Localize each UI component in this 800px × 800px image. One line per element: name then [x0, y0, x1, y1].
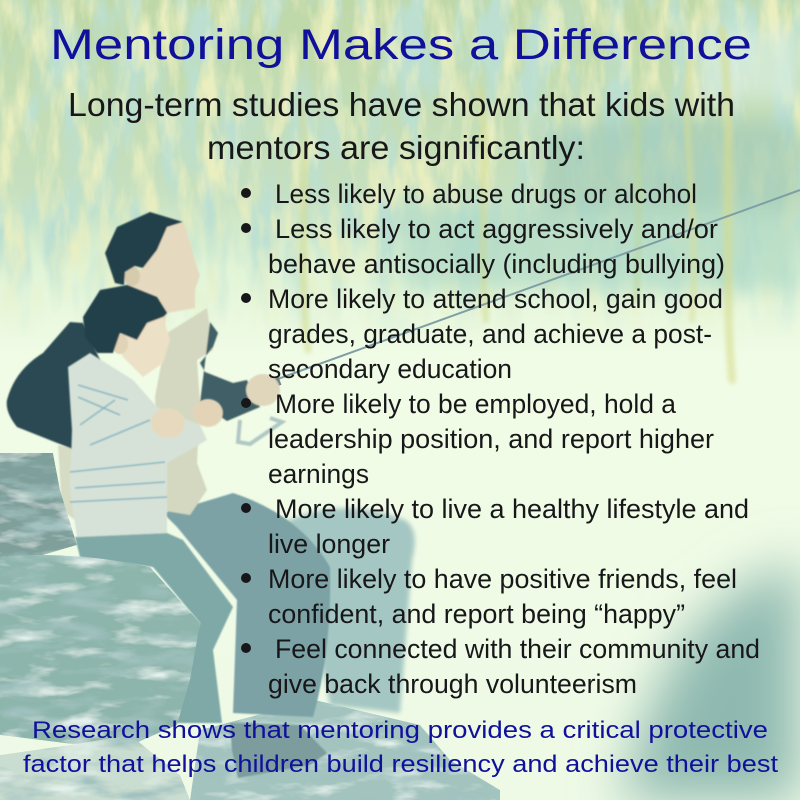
father legs [163, 493, 330, 717]
boy arm and hand [193, 399, 223, 427]
boy ear [112, 334, 128, 354]
large rock [0, 555, 200, 750]
bullet 4 [241, 389, 714, 489]
father jacket [7, 322, 100, 452]
distant pavilion and water [400, 30, 800, 290]
bullet 2: behave antisocially (including bullying) [268, 249, 725, 279]
father lower vest [58, 445, 80, 520]
bullet 4: earnings [268, 459, 369, 489]
father hair [105, 212, 183, 285]
lower right misty rock [620, 560, 800, 800]
bullet 3: More likely to attend school, gain good [268, 284, 723, 314]
photo: boy [68, 285, 233, 723]
rock behind boy [0, 453, 77, 557]
boy hair [83, 285, 167, 353]
pale rock bottom left [0, 735, 190, 800]
hoodie stripes [70, 385, 167, 502]
bullet 4: More likely to be employed, hold a [275, 389, 677, 419]
bullet list [241, 179, 760, 699]
father hand [246, 374, 280, 406]
closing statement: factor that helps children build resiliency and achieve their best [23, 751, 778, 778]
subtitle: mentors are significantly: [207, 129, 585, 166]
father sleeve [200, 322, 260, 421]
bullet 3: grades, graduate, and achieve a post- [268, 319, 712, 349]
bullet 6: confident, and report being “happy” [268, 599, 685, 629]
subtitle: Long-term studies have shown that kids with [68, 86, 735, 123]
willow foliage [0, 0, 800, 340]
father ear [124, 266, 140, 286]
bullet 7: Feel connected with their community and [275, 634, 760, 664]
bullet 6: More likely to have positive friends, feel [268, 564, 737, 594]
foreground low rocks [190, 700, 500, 800]
father vest [155, 308, 213, 515]
bullet 1: Less likely to abuse drugs or alcohol [275, 179, 697, 209]
bullet 5 [241, 494, 749, 559]
photo: rocks [0, 453, 200, 800]
boy face [117, 317, 170, 377]
closing statement: Research shows that mentoring provides a critical protective [32, 717, 768, 744]
boy jeans [75, 533, 233, 723]
closing statement [23, 717, 778, 778]
bullet 7 [241, 634, 760, 699]
father face [125, 222, 200, 332]
bullet 2 [241, 214, 725, 279]
fishing rod [180, 190, 800, 418]
bullet 4: leadership position, and report higher [268, 424, 714, 454]
bullet 3: secondary education [268, 354, 512, 384]
photo: father [7, 212, 330, 778]
subtitle [68, 86, 735, 166]
far shore rock [283, 508, 415, 713]
boy hoodie [68, 353, 207, 537]
bullet 5: live longer [268, 529, 390, 559]
title: Mentoring Makes a Difference [50, 21, 752, 69]
bullet 6 [241, 564, 737, 629]
bullet 2: Less likely to act aggressively and/or [275, 214, 718, 244]
hanging yellow strands [300, 0, 732, 380]
fishing reel [238, 418, 282, 444]
bullet 3 [241, 284, 723, 384]
bullet 7: give back through volunteerism [268, 669, 637, 699]
bullet 5: More likely to live a healthy lifestyle and [275, 494, 749, 524]
father boots [230, 723, 327, 778]
